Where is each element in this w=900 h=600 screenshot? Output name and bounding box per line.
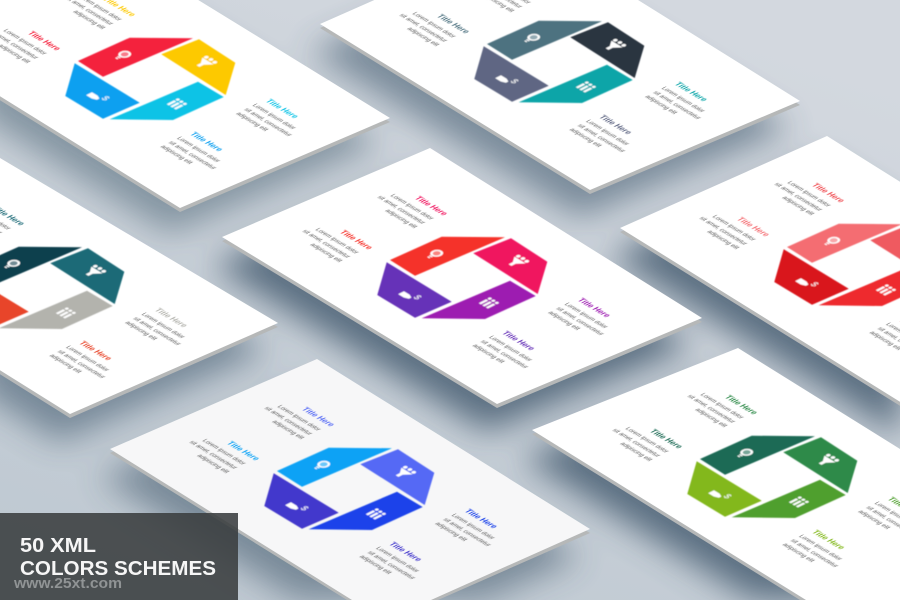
text block: left [292, 218, 376, 265]
segment: charcoal [570, 22, 644, 78]
text block: left [179, 429, 263, 476]
text block: bottom [867, 315, 900, 361]
text block: right: sit amet, consectetur [554, 306, 606, 337]
icon: funnel [391, 465, 417, 480]
segment: grey purple [474, 46, 549, 102]
panel: bottom-right slide [532, 348, 900, 600]
text block: right: sit amet, consectetur [441, 517, 493, 548]
text block: bottom [47, 338, 128, 384]
segment: deep purple [377, 262, 452, 318]
text block: bottom [158, 129, 239, 175]
segment: dark teal [0, 247, 82, 286]
text block: right: adipiscing elit [856, 509, 892, 530]
text block: bottom: Lorem ipsum dolor [64, 345, 111, 373]
icon: funnel [81, 264, 107, 279]
text block: top: Title Here [412, 195, 451, 217]
panel: left slide [0, 152, 278, 418]
text block: left: Title Here [224, 440, 263, 462]
text block: left [389, 2, 473, 49]
text block: left: Title Here [647, 428, 686, 450]
text block: bottom [357, 539, 438, 585]
text block: right: Title Here [152, 307, 190, 329]
text block: left: sit amet, consectetur [187, 440, 239, 470]
segment: pink [473, 238, 547, 294]
text block: left: sit amet, consectetur [300, 229, 352, 259]
slide surface [320, 0, 800, 194]
text block: top [254, 395, 338, 442]
text block: top: Lorem ipsum dolor [388, 193, 435, 221]
text block: top: Title Here [809, 182, 848, 204]
text block: right [234, 96, 315, 142]
icon: bulb [522, 33, 541, 43]
text block: bottom: Title Here [500, 330, 538, 352]
text block: left [602, 417, 686, 464]
icon: bulb [425, 249, 444, 259]
text block: top: adipiscing elit [693, 407, 729, 429]
icon: funnel [504, 254, 530, 269]
text block: left: Lorem ipsum dolor [410, 11, 457, 39]
octagon diagram [377, 237, 547, 319]
text block: bottom: Title Here [77, 340, 115, 362]
text block: bottom: Title Here [597, 114, 635, 136]
text block: left: adipiscing elit [195, 453, 231, 475]
watermark: www.25xt.com [13, 575, 122, 592]
text block: left: adipiscing elit [405, 26, 441, 48]
text block: left: sit amet, consectetur [697, 216, 749, 246]
segment: coral [870, 225, 900, 281]
icon: funnel [601, 38, 627, 53]
text block: bottom: adipiscing elit [47, 353, 83, 374]
icon: hand with dollar [285, 499, 312, 513]
icon: bulb [113, 50, 132, 60]
slide surface [532, 348, 900, 600]
segment: purple [422, 281, 536, 319]
text block: bottom: Lorem ipsum dolor [374, 546, 421, 574]
icon: hand with dollar [708, 487, 735, 501]
panel: right slide [620, 136, 900, 412]
text block: bottom: Lorem ipsum dolor [797, 534, 844, 562]
text block: bottom: sit amet, consectetur [789, 538, 840, 569]
text block: bottom: sit amet, consectetur [479, 339, 530, 370]
panel: top-left slide [0, 0, 390, 212]
octagon diagram [264, 448, 434, 530]
text block: top: sit amet, consectetur [262, 406, 314, 436]
panel: center slide [222, 148, 702, 408]
icon: bulb [312, 460, 331, 470]
icon: people [56, 307, 77, 319]
text block: top: adipiscing elit [383, 208, 419, 230]
text block: right: Title Here [575, 297, 613, 319]
icon: bulb [2, 259, 21, 269]
text block: top: sit amet, consectetur [685, 394, 737, 424]
icon: people [366, 508, 387, 520]
text block: top: Lorem ipsum dolor [275, 404, 322, 432]
text block: left: Lorem ipsum dolor [710, 214, 757, 242]
icon: bulb [822, 236, 841, 246]
icon: funnel [814, 453, 840, 468]
panel: bottom slide [110, 359, 590, 600]
text block: top [0, 194, 28, 241]
text block: right: adipiscing elit [234, 111, 270, 132]
text block: top: Lorem ipsum dolor [698, 392, 745, 420]
panel: top-right slide [320, 0, 800, 194]
segment: dark green [700, 436, 815, 475]
text block: top: sit amet, consectetur [772, 182, 824, 212]
text block: bottom: Lorem ipsum dolor [175, 136, 222, 164]
text block: right: Title Here [672, 81, 710, 103]
segment: grass green [732, 480, 846, 518]
text block: right: sit amet, consectetur [242, 107, 294, 138]
heading: colors schemes: COLORS SCHEMES [20, 558, 216, 580]
text block: top: sit amet, consectetur [375, 195, 427, 225]
heading: 50 XML: 50 XML [20, 535, 96, 557]
text block: bottom: Title Here [188, 131, 226, 153]
text block: top: Title Here [299, 406, 338, 428]
text block: top [764, 171, 848, 218]
segment: indigo [264, 473, 339, 529]
text block: left: Lorem ipsum dolor [623, 426, 670, 454]
slide surface [110, 359, 590, 600]
segment: salmon [787, 224, 900, 263]
text block: bottom: adipiscing elit [470, 343, 506, 364]
text block: right: sit amet, consectetur [651, 90, 703, 121]
segment: yellow [161, 39, 235, 95]
octagon diagram [65, 38, 235, 120]
segment: teal [519, 65, 633, 103]
icon: people [576, 81, 597, 93]
slide surface [0, 152, 278, 418]
text block: left: Title Here [734, 216, 773, 238]
text block: left: Lorem ipsum dolor [1, 28, 48, 56]
text block: right: Lorem ipsum dolor [139, 312, 187, 340]
text block: bottom: sit amet, consectetur [576, 123, 627, 154]
text block: bottom [567, 112, 648, 158]
icon: hand with dollar [495, 72, 522, 86]
segment: royal blue [309, 492, 423, 530]
segment: orange red [0, 272, 29, 328]
octagon diagram [0, 247, 124, 329]
octagon diagram [474, 21, 644, 103]
segment: slate [487, 21, 602, 60]
text block: right: adipiscing elit [433, 521, 469, 542]
slide surface [222, 148, 702, 408]
icon: hand with dollar [398, 288, 425, 302]
text block: bottom: Lorem ipsum dolor [584, 119, 631, 147]
text block: bottom: sit amet, consectetur [366, 550, 417, 581]
icon: hand with dollar [795, 275, 822, 289]
text block: bottom: adipiscing elit [158, 144, 194, 165]
slide surface [0, 0, 390, 212]
text block: top: adipiscing elit [780, 195, 816, 217]
text block: left: Title Here [337, 229, 376, 251]
text block: bottom [780, 527, 861, 573]
text block: left: adipiscing elit [705, 229, 741, 251]
segment: green [783, 437, 857, 493]
text block: bottom: sit amet, consectetur [167, 140, 218, 171]
segment: dark red [774, 249, 849, 305]
text block: left: Title Here [25, 30, 64, 52]
segment: red [390, 237, 505, 276]
icon: hand with dollar [86, 89, 113, 103]
text block: top [55, 0, 139, 32]
segment: lime [687, 461, 762, 517]
text block: left: adipiscing elit [308, 242, 344, 264]
icon: hand with dollar [0, 298, 2, 312]
text block: bottom: adipiscing elit [567, 127, 603, 148]
text block: left [689, 205, 773, 252]
icon: funnel [192, 55, 218, 70]
segment: red [78, 38, 193, 77]
text block: left: Lorem ipsum dolor [313, 227, 360, 255]
segment: cyan [110, 82, 224, 120]
segment: sky blue [277, 448, 392, 487]
text block: top: adipiscing elit [270, 419, 306, 441]
text block: right [546, 295, 627, 341]
text block: right: Lorem ipsum dolor [250, 103, 298, 131]
segment: warm grey [0, 291, 113, 329]
text block: right: Lorem ipsum dolor [449, 513, 497, 541]
text block: bottom: adipiscing elit [357, 554, 393, 575]
text block: bottom: adipiscing elit [780, 542, 816, 563]
segment: teal [50, 248, 124, 304]
text block: right: adipiscing elit [546, 310, 582, 331]
text block: left: sit amet, consectetur [397, 13, 449, 43]
text block: top [367, 184, 451, 231]
icon: people [876, 284, 897, 296]
text block: bottom [470, 328, 551, 374]
icon: people [167, 98, 188, 110]
text block: left: sit amet, consectetur [610, 428, 662, 458]
text block: bottom: Lorem ipsum dolor [487, 335, 534, 363]
text block: right [643, 79, 724, 125]
slide surface [620, 136, 900, 412]
text block: left: Title Here [434, 13, 473, 35]
segment: bright red [819, 268, 900, 306]
text block: left [0, 19, 64, 66]
text block: top [677, 383, 761, 430]
icon: people [479, 297, 500, 309]
text block: right: sit amet, consectetur [131, 316, 183, 347]
icon: people [789, 496, 810, 508]
text block: top [464, 0, 548, 15]
icon: bulb [735, 448, 754, 458]
segment: periwinkle [360, 449, 434, 505]
text block: right [123, 305, 204, 351]
text block: right: adipiscing elit [643, 94, 679, 115]
text block: top: Title Here [722, 394, 761, 416]
text block: right [856, 494, 900, 540]
segment: blue [65, 63, 140, 119]
text block: right: Lorem ipsum dolor [659, 86, 707, 114]
text block: bottom: Title Here [387, 541, 425, 563]
text block: left: adipiscing elit [618, 441, 654, 463]
text block: right: adipiscing elit [123, 320, 159, 341]
text block: bottom: sit amet, consectetur [56, 349, 107, 380]
text block: right [433, 506, 514, 552]
text block: right: Title Here [462, 508, 500, 530]
text block: right: Lorem ipsum dolor [562, 302, 610, 330]
panel: caption banner [0, 513, 238, 600]
octagon diagram [774, 224, 900, 306]
octagon diagram [687, 436, 857, 518]
text block: right: Title Here [263, 98, 301, 120]
text block: top: adipiscing elit [71, 9, 107, 31]
text block: left: Lorem ipsum dolor [200, 438, 247, 466]
text block: top: Lorem ipsum dolor [785, 180, 832, 208]
text block: bottom: Title Here [810, 529, 848, 551]
